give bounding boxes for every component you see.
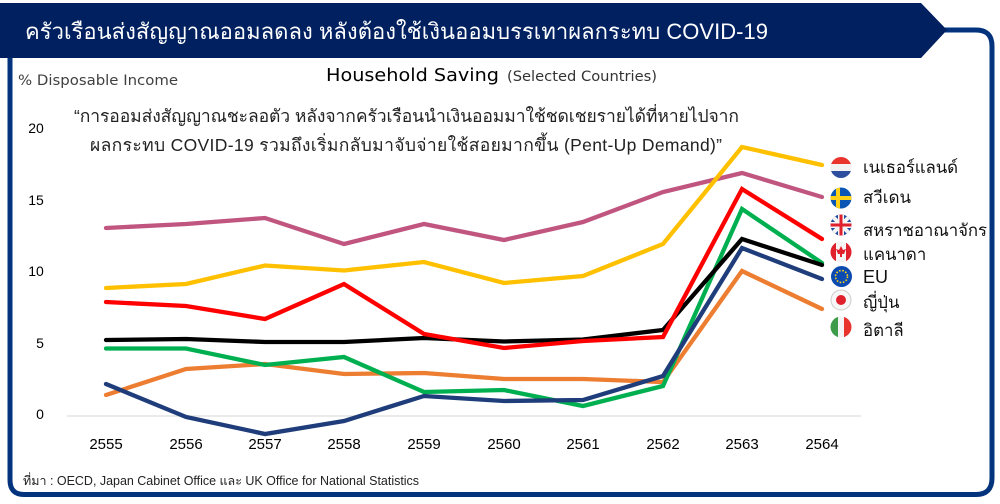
line: EU	[106, 248, 822, 434]
x axis labels: 2559	[407, 436, 441, 453]
y axis labels: 0	[36, 406, 44, 422]
y axis labels: 15	[28, 192, 44, 208]
y axis labels	[28, 120, 44, 422]
label: Netherlands: เนเธอร์แลนด์	[863, 158, 958, 177]
label: UK: สหราชอาณาจักร	[863, 221, 987, 240]
y axis labels: 20	[28, 120, 44, 136]
x axis labels: 2556	[169, 436, 203, 453]
x axis labels: 2562	[646, 436, 680, 453]
line chart	[106, 147, 822, 434]
flag: Italy	[830, 316, 852, 338]
y axis labels: 5	[36, 335, 44, 351]
quote text: “การออมส่งสัญญาณชะลอตัว หลังจากครัวเรือนนำเงินออมมาใช้ชดเชยรายได้ที่หายไปจาก	[74, 104, 739, 126]
line: Netherlands	[106, 147, 822, 288]
flag: EU	[831, 266, 852, 287]
chart title: Household Saving	[326, 65, 499, 86]
source note: ที่มา : OECD, Japan Cabinet Office และ UK Office for National Statistics	[23, 472, 419, 488]
line: Sweden	[106, 173, 822, 244]
label: Canada: แคนาดา	[863, 245, 926, 264]
x axis labels: 2561	[566, 436, 600, 453]
x axis labels: 2555	[89, 436, 123, 453]
title banner	[0, 3, 947, 58]
flag: UK	[830, 214, 852, 236]
line: Japan	[106, 271, 822, 395]
chart title: (Selected Countries)	[507, 69, 657, 85]
quote text: ผลกระทบ COVID-19 รวมถึงเริ่มกลับมาจับจ่ายใช้สอยมากขึ้น (Pent-Up Demand)”	[90, 132, 722, 155]
legend	[830, 157, 987, 340]
flag: Canada	[830, 241, 852, 263]
flag: Japan	[831, 290, 851, 310]
line: Italy	[106, 209, 822, 406]
x axis baseline	[67, 415, 861, 417]
flag: Sweden	[830, 187, 852, 209]
x axis labels: 2560	[487, 436, 521, 453]
flag: Netherlands	[830, 157, 852, 179]
label: Japan: ญี่ปุ่น	[863, 290, 900, 313]
x axis labels: 2558	[327, 436, 361, 453]
title banner: ครัวเรือนส่งสัญญาณออมลดลง หลังต้องใช้เงินออมบรรเทาผลกระทบ COVID-19	[25, 19, 768, 44]
x axis labels: 2564	[805, 436, 839, 453]
x axis labels: 2563	[725, 436, 759, 453]
line: Canada	[106, 239, 822, 342]
x axis labels: 2557	[248, 436, 282, 453]
x axis labels	[89, 436, 839, 453]
label: Sweden: สวีเดน	[863, 188, 912, 207]
y axis unit label: % Disposable Income	[18, 73, 178, 89]
line: UK	[106, 189, 822, 348]
label: EU: EU	[863, 267, 888, 287]
y axis labels: 10	[28, 263, 44, 279]
label: Italy: อิตาลี	[863, 321, 904, 340]
quote text	[74, 104, 739, 155]
chart title	[326, 65, 657, 86]
